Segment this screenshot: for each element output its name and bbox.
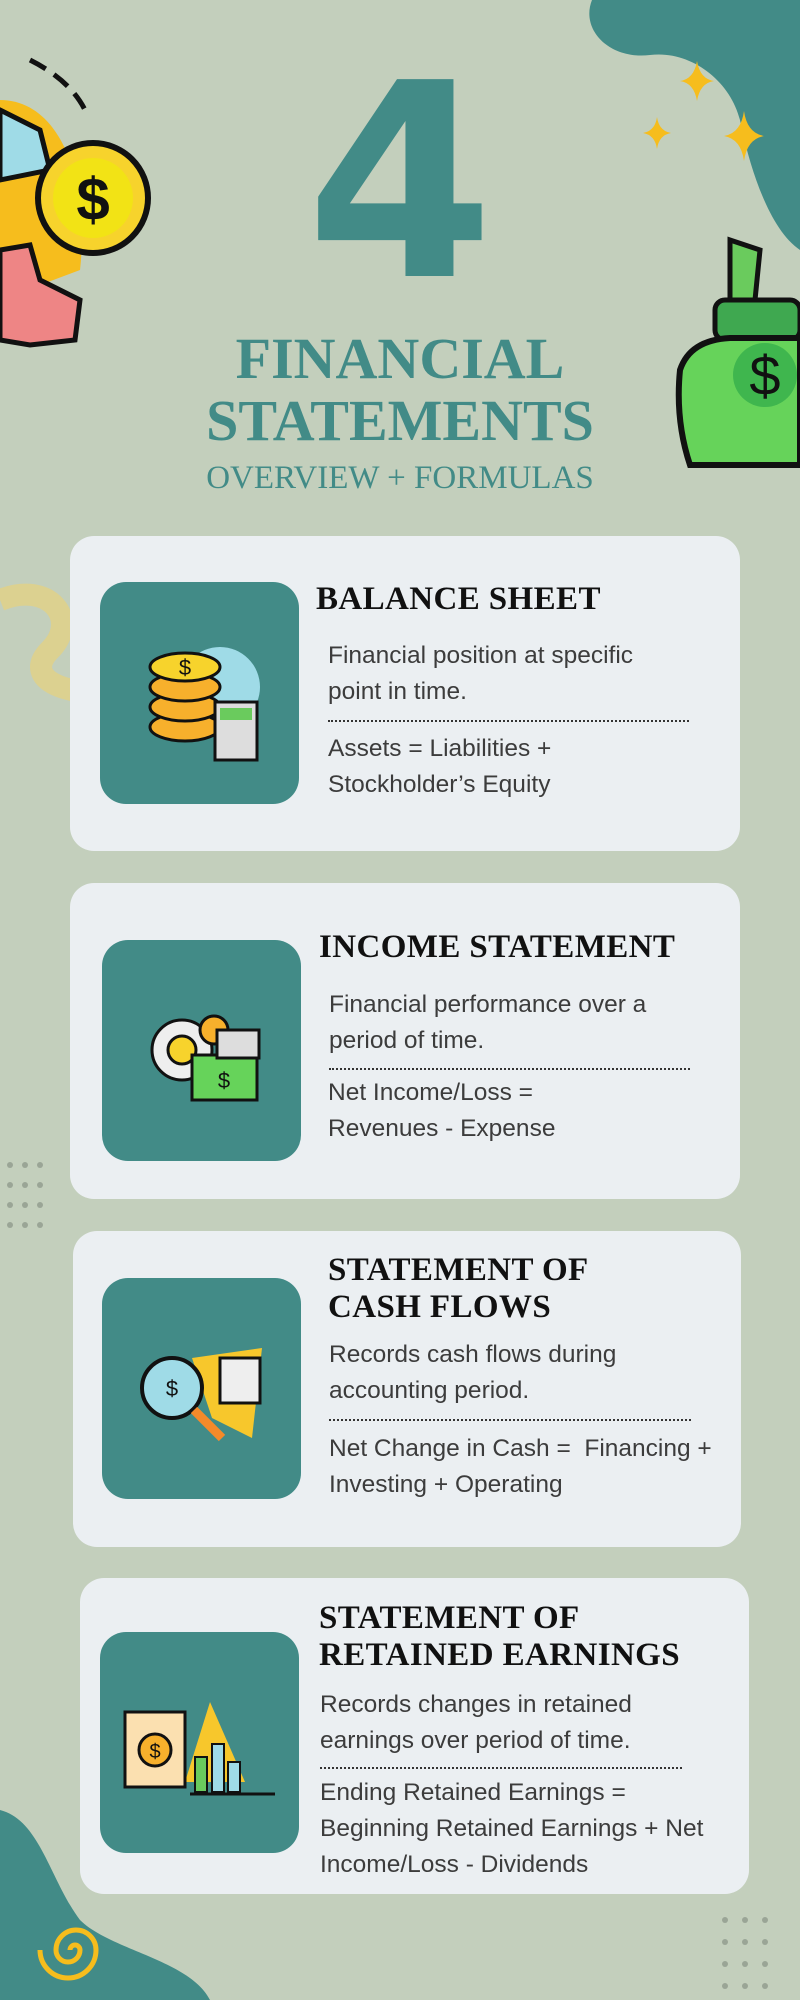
heading: RETAINED EARNINGS (319, 1637, 680, 1673)
text: formula: Investing + Operating (329, 1471, 563, 1498)
decoration: dot grid right (722, 1917, 768, 1989)
icon: clipboard and chart (100, 1632, 299, 1853)
icon: coins and calculator (100, 582, 299, 804)
text: formula: Net Change in Cash = Financing + (329, 1435, 712, 1462)
heading: INCOME STATEMENT (319, 929, 675, 965)
icon: money bag (676, 236, 800, 468)
text: description: Records changes in retained (320, 1691, 632, 1718)
heading: STATEMENT OF (319, 1600, 580, 1636)
text: formula: Assets = Liabilities + (328, 735, 551, 762)
icon: clipboard and chart: $ (149, 1741, 161, 1763)
subtitle: OVERVIEW + FORMULAS (206, 460, 594, 496)
text: formula: Revenues - Expense (328, 1115, 555, 1142)
text: formula (329, 1435, 712, 1498)
heading: BALANCE SHEET (316, 581, 601, 617)
icon: gears and money (102, 940, 301, 1161)
decoration: yellow squiggle (0, 584, 70, 701)
heading: STATEMENT OF (328, 1252, 589, 1288)
text: formula (328, 1079, 555, 1142)
panel: income statement (70, 883, 740, 1199)
icon: magnifier and document: $ (166, 1376, 178, 1401)
text: formula: Stockholder’s Equity (328, 771, 550, 798)
title: financial statements: STATEMENTS (206, 388, 594, 453)
panel: balance sheet (70, 536, 740, 851)
heading (328, 1252, 589, 1325)
text: description: Financial position at specific (328, 642, 633, 669)
icon: magnifier and document (102, 1278, 301, 1499)
icon: piggy bank and coin (0, 58, 151, 348)
text: description: accounting period. (329, 1377, 529, 1404)
text: description (320, 1691, 632, 1754)
icon: gears and money: $ (218, 1068, 230, 1093)
text: formula: Net Income/Loss = (328, 1079, 533, 1106)
text: description: period of time. (329, 1027, 484, 1054)
text: description: Financial performance over a (329, 991, 646, 1018)
text: description (328, 642, 633, 705)
title: financial statements: FINANCIAL (236, 326, 564, 391)
text: description: point in time. (328, 678, 467, 705)
text: formula (320, 1779, 704, 1878)
text: formula (328, 735, 551, 798)
decoration: top-right blob (589, 0, 800, 250)
text: description (329, 991, 646, 1054)
text: formula: Income/Loss - Dividends (320, 1851, 588, 1878)
title: big number 4: 4 (306, 25, 494, 340)
panel: statement of retained earnings (80, 1578, 749, 1894)
decoration: dot grid left (7, 1162, 43, 1228)
decoration: bottom-left blob with spiral (0, 1810, 210, 2000)
text: formula: Ending Retained Earnings = (320, 1779, 626, 1806)
heading: CASH FLOWS (328, 1289, 551, 1325)
panel: statement of cash flows (73, 1231, 741, 1547)
icon: coins and calculator: $ (179, 655, 191, 680)
text: description (329, 1341, 616, 1404)
text: description: earnings over period of time. (320, 1727, 630, 1754)
title: financial statements (206, 326, 594, 453)
heading (319, 1600, 680, 1673)
icon: sparkles (643, 61, 764, 161)
icon: piggy bank and coin: $ (76, 166, 110, 233)
text: description: Records cash flows during (329, 1341, 616, 1368)
icon: money bag: $ (749, 344, 781, 407)
text: formula: Beginning Retained Earnings + Net (320, 1815, 703, 1842)
